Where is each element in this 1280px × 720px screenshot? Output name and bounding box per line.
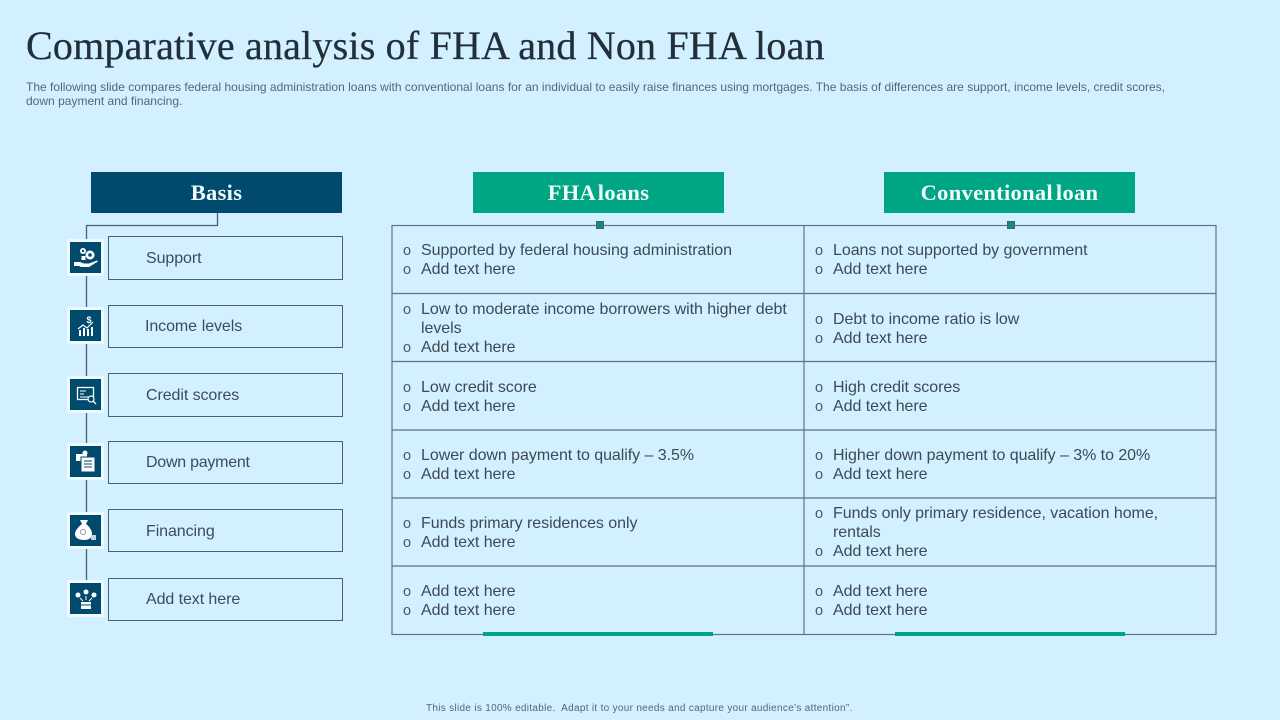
subtitle text block xyxy=(26,80,1165,108)
FHA cell: down payment: Add text here xyxy=(421,466,516,483)
Conventional cell: income levels: o xyxy=(815,312,823,328)
Conventional cell: add text: Add text here xyxy=(833,602,928,619)
FHA cell: financing: o xyxy=(403,516,411,532)
FHA cell: add text: Add text here xyxy=(421,602,516,619)
row label: Credit scores: Credit scores xyxy=(146,387,239,404)
Conventional cell: financing: Add text here xyxy=(833,543,928,560)
Conventional cell: income levels: Add text here xyxy=(833,330,928,347)
FHA cell: support: o xyxy=(403,262,411,278)
icon: hand holding gears xyxy=(67,239,104,276)
accent bar: Conventional column xyxy=(895,632,1125,636)
row label box: Add text here xyxy=(108,578,343,621)
comparison table grid xyxy=(391,224,1217,636)
FHA cell: credit scores: o xyxy=(403,380,411,396)
FHA cell: support: Supported by federal housing administration xyxy=(421,242,732,259)
icon: briefcase network xyxy=(67,580,104,617)
row label: Support: Support xyxy=(146,250,201,267)
heading: Basis xyxy=(91,172,342,213)
FHA cell: add text: Add text here xyxy=(421,583,516,600)
heading: FHA loans xyxy=(473,172,724,213)
FHA cell: down payment: Lower down payment to qualify – 3.5% xyxy=(421,447,694,464)
heading: Conventional loan: Conventional loan xyxy=(921,180,1098,205)
icon: money bag xyxy=(67,512,104,549)
FHA cell: financing: o xyxy=(403,535,411,551)
Conventional cell: support: o xyxy=(815,262,823,278)
Conventional cell: add text: o xyxy=(815,603,823,619)
FHA cell: down payment: o xyxy=(403,467,411,483)
Conventional cell: financing: o xyxy=(815,544,823,560)
FHA cell: financing xyxy=(403,515,638,551)
Conventional cell: down payment: o xyxy=(815,448,823,464)
row label box: Income levels xyxy=(108,305,343,348)
FHA cell: credit scores xyxy=(403,379,537,415)
FHA cell: income levels: levels xyxy=(421,320,462,337)
FHA cell: add text: o xyxy=(403,603,411,619)
Conventional cell: financing: o xyxy=(815,506,823,522)
FHA cell: credit scores: Add text here xyxy=(421,398,516,415)
row label box: Financing xyxy=(108,509,343,552)
icon: payment documents xyxy=(67,443,104,480)
row label: Add text here: Add text here xyxy=(146,591,240,608)
row label box: Support xyxy=(108,236,343,280)
Conventional cell: credit scores: o xyxy=(815,380,823,396)
heading: FHA loans: FHA loans xyxy=(548,180,649,205)
Conventional cell: credit scores: Add text here xyxy=(833,398,928,415)
Conventional cell: support: Loans not supported by government xyxy=(833,242,1088,259)
Conventional cell: support xyxy=(815,242,1088,278)
FHA cell: add text: o xyxy=(403,584,411,600)
Conventional cell: income levels: Debt to income ratio is low xyxy=(833,311,1019,328)
Conventional cell: down payment: Higher down payment to qualify – 3% to 20% xyxy=(833,447,1150,464)
marker: FHA column connector xyxy=(596,221,604,229)
Conventional cell: financing xyxy=(815,505,1158,560)
icon: credit score screen xyxy=(67,376,104,413)
Conventional cell: add text xyxy=(815,583,928,619)
row label box: Credit scores xyxy=(108,373,343,417)
FHA cell: support xyxy=(403,242,732,278)
FHA cell: income levels: o xyxy=(403,302,411,318)
FHA cell: financing: Funds primary residences only xyxy=(421,515,637,532)
FHA cell: down payment: o xyxy=(403,448,411,464)
Conventional cell: income levels: o xyxy=(815,331,823,347)
Conventional cell: support: Add text here xyxy=(833,261,928,278)
FHA cell: credit scores: o xyxy=(403,399,411,415)
Conventional cell: down payment: o xyxy=(815,467,823,483)
Conventional cell: support: o xyxy=(815,243,823,259)
FHA cell: add text xyxy=(403,583,516,619)
FHA cell: support: o xyxy=(403,243,411,259)
heading: Conventional loan xyxy=(884,172,1135,213)
Conventional cell: down payment: Add text here xyxy=(833,466,928,483)
row label: Financing: Financing xyxy=(146,523,215,540)
Conventional cell: financing: Funds only primary residence, vacation home, xyxy=(833,505,1158,522)
footer note: This slide is 100% editable. Adapt it to your needs and capture your audience’s attention”. xyxy=(426,703,853,714)
FHA cell: financing: Add text here xyxy=(421,534,516,551)
row label: Down payment: Down payment xyxy=(146,454,250,471)
row label box: Down payment xyxy=(108,441,343,484)
FHA cell: credit scores: Low credit score xyxy=(421,379,537,396)
icon: income chart xyxy=(67,307,104,344)
Conventional cell: income levels xyxy=(815,311,1020,347)
title: Comparative analysis of FHA and Non FHA loan xyxy=(26,23,825,68)
FHA cell: income levels: Low to moderate income borrowers with higher debt xyxy=(421,301,787,318)
Conventional cell: credit scores: o xyxy=(815,399,823,415)
Conventional cell: financing: rentals xyxy=(833,524,881,541)
row label: Income levels: Income levels xyxy=(145,318,242,335)
accent bar: FHA column xyxy=(483,632,713,636)
FHA cell: support: Add text here xyxy=(421,261,516,278)
subtitle text block: down payment and financing. xyxy=(26,94,182,108)
FHA cell: income levels: Add text here xyxy=(421,339,516,356)
Conventional cell: down payment xyxy=(815,447,1150,483)
FHA cell: down payment xyxy=(403,447,694,483)
Conventional cell: add text: o xyxy=(815,584,823,600)
FHA cell: income levels xyxy=(403,301,787,356)
subtitle text block: The following slide compares federal housing administration loans with conventional loans for an individual to easily raise finances using mortgages. The basis of differences are support, income levels, credit scores, xyxy=(26,80,1165,94)
heading: Basis: Basis xyxy=(191,180,242,205)
marker: Conventional column connector xyxy=(1007,221,1015,229)
Conventional cell: credit scores: High credit scores xyxy=(833,379,960,396)
FHA cell: income levels: o xyxy=(403,340,411,356)
Conventional cell: add text: Add text here xyxy=(833,583,928,600)
connector: basis tree lines xyxy=(86,213,218,580)
Conventional cell: credit scores xyxy=(815,379,960,415)
icon: income chart: $ xyxy=(86,315,92,325)
